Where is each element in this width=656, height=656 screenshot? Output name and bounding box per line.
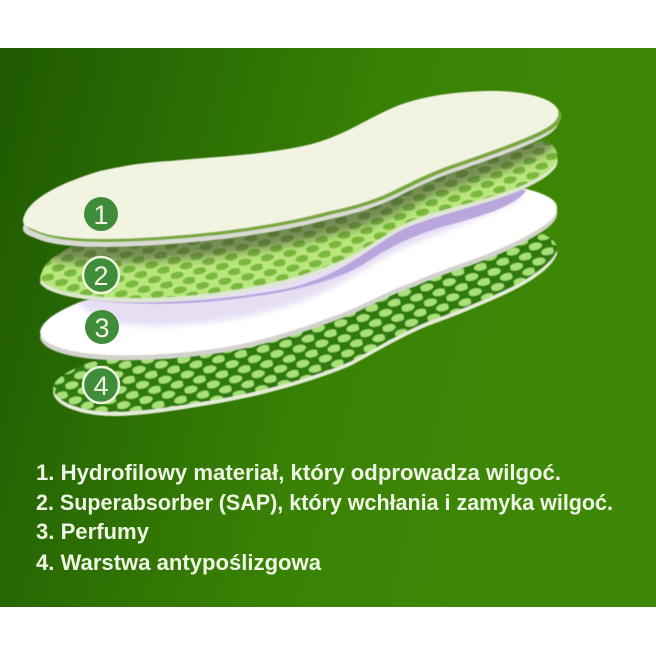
number badge 1: 1 (93, 200, 109, 230)
number badge 1 (84, 197, 118, 231)
number badge 2: 2 (93, 261, 109, 291)
insole layer 1: hydrophilic (23, 91, 561, 247)
number badge 3 (85, 310, 119, 344)
insole layer 4: anti-slip (53, 234, 557, 416)
legend line 4: 4. Warstwa antypoślizgowa (36, 550, 321, 575)
lilac band (80, 188, 526, 304)
number badge 2 (83, 257, 119, 293)
number badge 4: 4 (93, 371, 109, 401)
legend text (36, 460, 613, 575)
cast shadow from top insole (48, 141, 556, 270)
insole layer 3: perfume (40, 185, 557, 360)
number badge 3: 3 (94, 313, 110, 343)
legend line 3: 3. Perfumy (36, 519, 149, 544)
legend line 2: 2. Superabsorber (SAP), który wchłania i zamyka wilgoć. (36, 490, 613, 515)
number badge 4 (83, 367, 119, 403)
legend line 1: 1. Hydrofilowy materiał, który odprowadza wilgoć. (36, 460, 561, 485)
insole layer 2: superabsorber (39, 140, 558, 304)
